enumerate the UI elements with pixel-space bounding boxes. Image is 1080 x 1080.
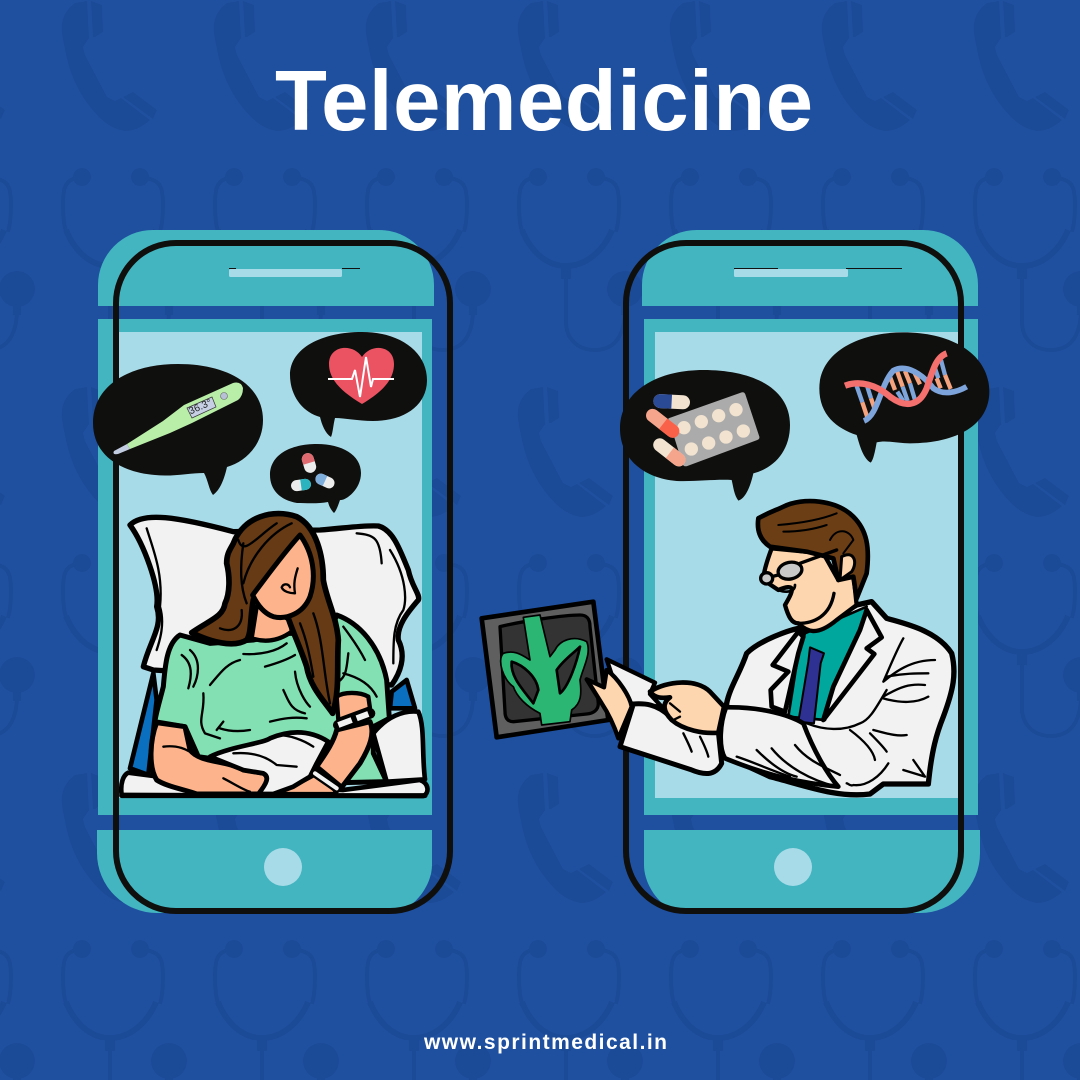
shirt xyxy=(788,607,867,720)
speech bubble: medicines xyxy=(620,370,790,501)
speech bubble: DNA xyxy=(819,332,989,463)
coat body xyxy=(727,602,954,795)
jaw line xyxy=(798,593,834,623)
near sleeve xyxy=(620,704,722,774)
hair xyxy=(758,501,868,598)
blanket xyxy=(210,732,328,794)
lapels xyxy=(771,610,882,720)
patient in bed xyxy=(121,514,427,796)
website footer: www.sprintmedical.in xyxy=(423,1031,667,1054)
hair xyxy=(192,514,338,713)
doctor with x-ray xyxy=(482,501,954,795)
wristbands xyxy=(338,713,370,725)
speech bubble: heart xyxy=(290,332,427,437)
phone: patient xyxy=(97,230,450,913)
blister pack xyxy=(668,392,759,466)
nose xyxy=(778,585,795,592)
x-ray film xyxy=(482,602,608,737)
left arm xyxy=(151,723,267,794)
speech bubble: thermometer xyxy=(93,364,263,495)
pointing hand xyxy=(650,683,724,733)
capsules xyxy=(653,394,690,410)
blue bed backing xyxy=(130,673,415,775)
face xyxy=(253,535,313,617)
phone: doctor xyxy=(626,230,980,913)
holding hand xyxy=(587,670,632,738)
ear xyxy=(840,555,855,580)
main arm xyxy=(721,707,838,787)
bed edge xyxy=(122,788,425,803)
neck xyxy=(252,607,292,641)
wrinkles xyxy=(147,528,405,792)
coat wrinkles xyxy=(670,638,935,787)
glasses xyxy=(761,550,837,584)
neck and face xyxy=(763,548,857,631)
speech bubble: thermometer: 36.3° xyxy=(187,397,214,417)
mattress xyxy=(121,711,427,796)
hair strands xyxy=(220,523,330,703)
pillow xyxy=(130,517,419,685)
far sleeve xyxy=(607,659,662,707)
hospital gown xyxy=(155,615,389,783)
tie xyxy=(798,647,824,723)
title: Telemedicine xyxy=(275,54,813,149)
right arm xyxy=(337,693,370,720)
speech bubble: pills xyxy=(270,444,361,513)
